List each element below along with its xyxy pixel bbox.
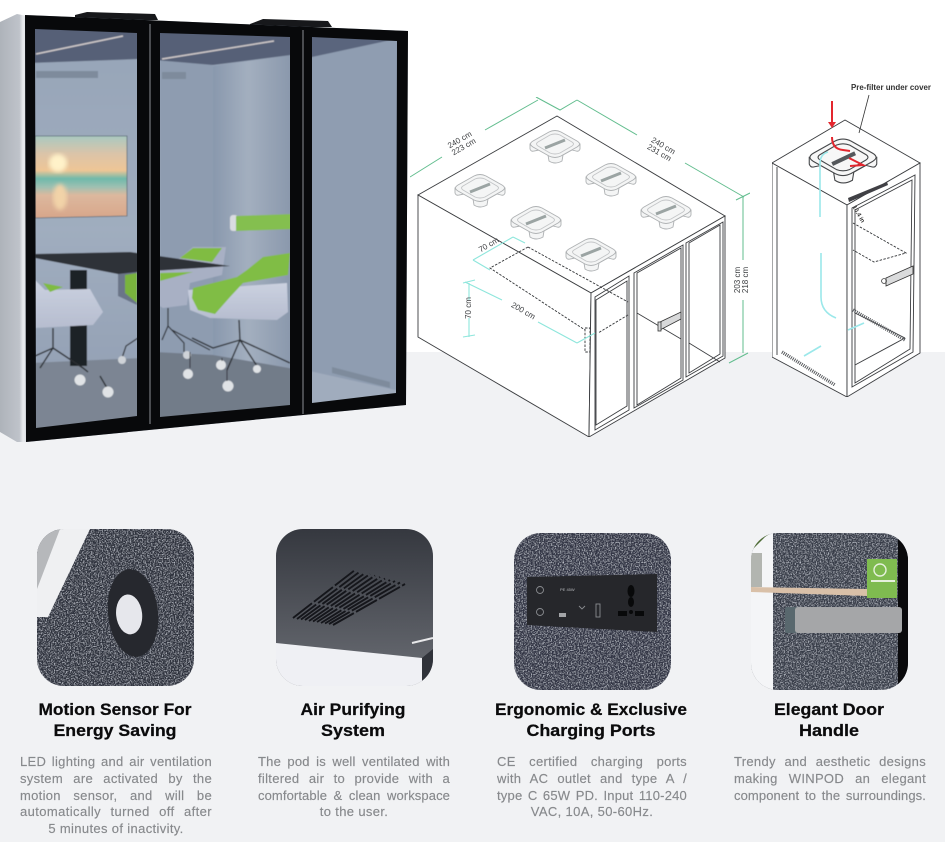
- cyan dimension lines: [463, 237, 595, 343]
- airflow diagram: [772, 83, 931, 397]
- dimension labels: [446, 129, 750, 321]
- motion sensor description: automatically turned off after: [20, 804, 212, 819]
- door handle title: Elegant Door: [774, 700, 884, 719]
- motion sensor title: Energy Saving: [54, 721, 176, 740]
- dimension labels: 70 cm: [464, 297, 473, 319]
- door handle: [658, 312, 681, 331]
- dimension labels: 240 cm: [650, 135, 677, 156]
- pre-filter pointer: [859, 95, 869, 133]
- top hatch: [848, 182, 888, 202]
- air purifying description: The pod is well ventilated with: [258, 754, 450, 769]
- dimension labels: 70 cm: [477, 235, 501, 254]
- red airflow arrows: [832, 101, 863, 166]
- table: [35, 252, 230, 366]
- green dimension lines: [410, 97, 750, 363]
- dimension labels: 231 cm: [646, 142, 673, 163]
- mid chair base: [122, 308, 210, 358]
- dashed table: [490, 247, 628, 352]
- door size label: 10.4 in: [851, 205, 865, 224]
- door handle description: component to the surroundings.: [734, 788, 926, 802]
- door handle description: making WINPOD an elegant: [734, 771, 926, 786]
- red arrow head: [828, 122, 836, 128]
- door handle description: [734, 754, 926, 803]
- charging ports title: Charging Ports: [526, 721, 656, 740]
- dimension diagram: [410, 97, 750, 437]
- white upper background: [0, 0, 945, 352]
- cyan airflow arrows: [804, 152, 864, 356]
- airflow handle: [882, 266, 913, 286]
- pod photo: [0, 12, 408, 445]
- air purifying description: comfortable & clean workspace: [258, 788, 450, 802]
- ceiling lights: [36, 36, 274, 59]
- motion sensor description: motion sensor, and will be: [20, 788, 212, 802]
- dimension labels: 218 cm: [741, 267, 750, 293]
- door handle green: [230, 214, 294, 231]
- back chair: [118, 247, 226, 308]
- air purifying description: filtered air to provide with a: [258, 771, 450, 786]
- hero illustrations: [0, 0, 945, 442]
- feature card: air purifying: [258, 529, 450, 819]
- motion sensor description: [20, 754, 212, 836]
- airflow pod wireframe: [772, 120, 920, 397]
- motion sensor title: [38, 700, 192, 740]
- charging ports title: Ergonomic & Exclusive: [495, 700, 687, 719]
- pod wireframe: [418, 116, 725, 437]
- dimension labels: 200 cm: [510, 300, 537, 321]
- air purifying description: to the user.: [320, 804, 388, 819]
- charging ports description: CE certified charging ports: [497, 754, 687, 769]
- wall vents: [36, 71, 390, 388]
- door handle title: Handle: [799, 721, 859, 740]
- charging ports description: with AC outlet and type A /: [497, 771, 687, 786]
- interior: [25, 15, 408, 445]
- door handle description: Trendy and aesthetic designs: [734, 754, 926, 769]
- dimension labels: 203 cm: [733, 267, 742, 293]
- wall tv: [35, 136, 127, 218]
- motion sensor description: LED lighting and air ventilation: [20, 754, 212, 769]
- dimension labels: 223 cm: [450, 136, 478, 157]
- roof fans: [455, 130, 691, 271]
- charging panel photo: PE 45W: [560, 587, 575, 592]
- air purifying description: [258, 754, 450, 819]
- vents: [782, 310, 905, 385]
- door handle title: [774, 700, 884, 740]
- air vent photo: [276, 529, 433, 686]
- air purifying title: System: [321, 721, 385, 740]
- airflow fan: [809, 139, 877, 183]
- air purifying title: [300, 700, 406, 740]
- charging ports description: type C 65W PD. Input 110-240: [497, 788, 687, 802]
- motion sensor photo: [37, 529, 194, 686]
- pre-filter label: Pre-filter under cover: [851, 83, 931, 92]
- dimension labels: 240 cm: [446, 129, 474, 150]
- charging ports description: VAC, 10A, 50-60Hz.: [531, 804, 653, 819]
- frame silver seams: [150, 24, 303, 424]
- motion sensor description: 5 minutes of inactivity.: [48, 821, 184, 836]
- motion sensor description: system are activated by the: [20, 771, 212, 786]
- feature card: charging ports: [495, 533, 687, 819]
- pod black frames: [25, 15, 408, 442]
- feature card: motion sensor: [20, 529, 212, 836]
- feature card: door handle: [734, 533, 926, 803]
- right chair: [183, 253, 290, 392]
- charging ports description: [497, 754, 687, 819]
- side panel: [0, 14, 27, 442]
- dashed shelf: [853, 223, 906, 262]
- left chair: [35, 280, 114, 398]
- charging ports title: [495, 700, 687, 740]
- charging panel photo: [514, 533, 671, 690]
- motion sensor title: Motion Sensor For: [38, 700, 192, 719]
- air purifying title: Air Purifying: [300, 700, 406, 719]
- top vents: [75, 12, 332, 27]
- door handle photo: [751, 533, 908, 690]
